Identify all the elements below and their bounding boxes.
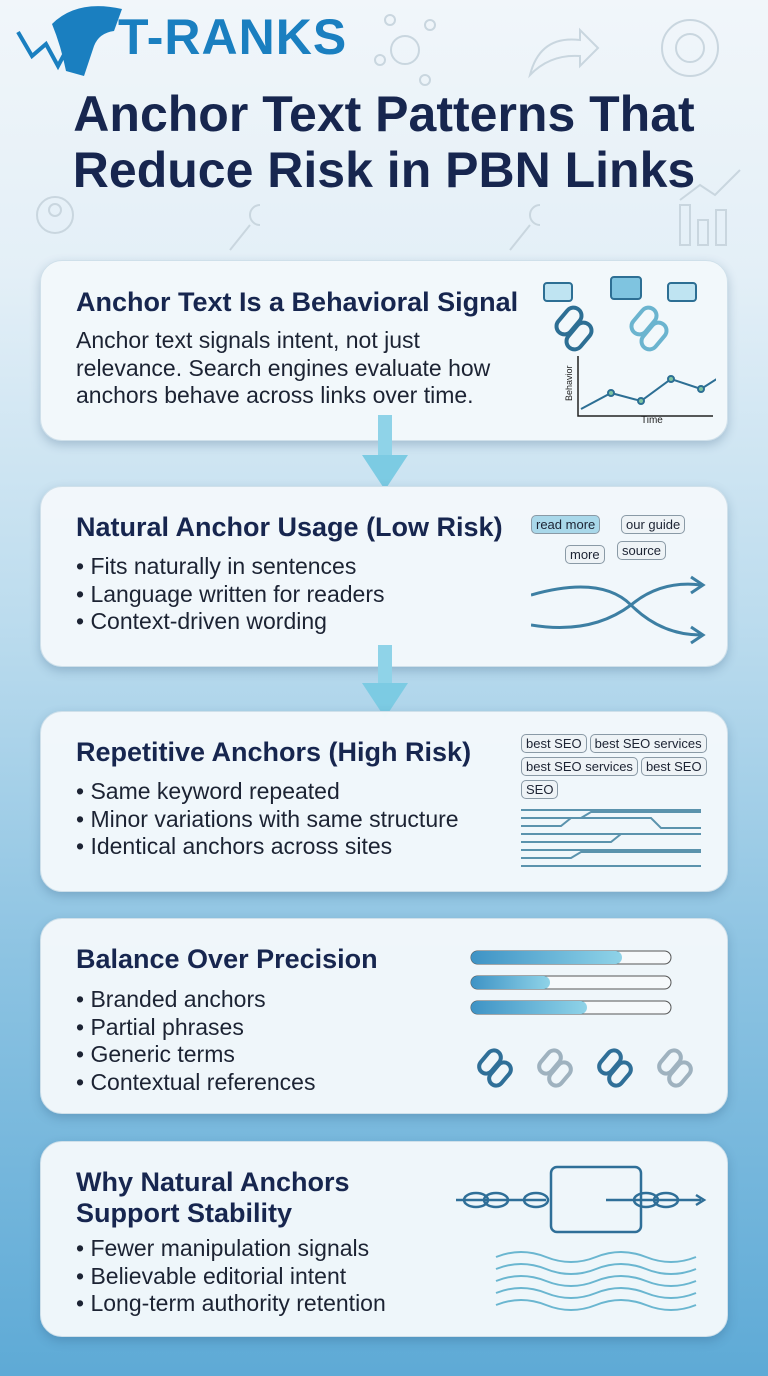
panel: behavioral signal: Anchor text signals intent, not just [76,327,420,353]
icon: repeated tags and lines [521,734,707,867]
icon: chat links and chart [543,276,716,426]
icon: tags and crossing arrows [531,515,706,644]
panel: balance: • Contextual references [76,1068,315,1094]
panel: balance: • Branded anchors [76,986,266,1012]
icon: repeated tags and lines: best SEO services [526,759,633,774]
panel: stability: • Believable editorial intent [76,1262,346,1288]
icon: tags and crossing arrows: more [570,547,600,562]
icon: chain loop and waves [456,1166,706,1311]
icon: tags and crossing arrows: source [622,543,661,558]
background icons [36,14,740,250]
icon: chat links and chart: Time [641,415,663,426]
title: Reduce Risk in PBN Links [73,142,695,198]
panel: behavioral signal: anchors behave across links over time. [76,382,474,408]
logo: T-RANKS [118,9,347,65]
panel: natural anchor usage [40,486,728,667]
panel: behavioral signal: relevance. Search engines evaluate how [76,354,490,380]
icon: repeated tags and lines: best SEO [526,736,582,751]
panel: stability [40,1141,728,1337]
panel: repetitive anchors: • Same keyword repeated [76,778,340,804]
panel: natural anchor usage: • Language written for readers [76,580,385,606]
panel: balance [40,918,728,1114]
panel: natural anchor usage: • Context-driven wording [76,608,327,634]
panel: repetitive anchors [40,711,728,892]
panel: stability: Support Stability [76,1198,292,1228]
icon: progress bars and links [470,950,693,1088]
icon: repeated tags and lines: SEO [526,782,553,797]
panel: natural anchor usage: Natural Anchor Usage (Low Risk) [76,512,503,542]
panel: stability: • Long-term authority retention [76,1290,386,1316]
title: Anchor Text Patterns That [73,86,695,142]
arrow 1 [362,415,408,486]
panel: balance: • Partial phrases [76,1014,244,1040]
panel: repetitive anchors: Repetitive Anchors (High Risk) [76,737,471,767]
panel: behavioral signal [40,260,728,441]
icon: repeated tags and lines: best SEO [646,759,702,774]
panel: stability: Why Natural Anchors [76,1167,350,1197]
panel: stability: • Fewer manipulation signals [76,1235,369,1261]
panel: behavioral signal: Anchor Text Is a Behavioral Signal [76,287,518,317]
panel: repetitive anchors: • Minor variations with same structure [76,806,459,832]
logo [16,6,347,76]
title [73,86,695,198]
icon: repeated tags and lines: best SEO services [595,736,702,751]
panel: repetitive anchors: • Identical anchors across sites [76,833,392,859]
icon: chat links and chart: Behavior [564,365,574,401]
panel: natural anchor usage: • Fits naturally in sentences [76,553,356,579]
icon: tags and crossing arrows: our guide [626,517,680,532]
panel: balance: • Generic terms [76,1041,235,1067]
panel: balance: Balance Over Precision [76,944,378,974]
icon: tags and crossing arrows: read more [536,517,595,532]
arrow 2 [362,645,408,711]
